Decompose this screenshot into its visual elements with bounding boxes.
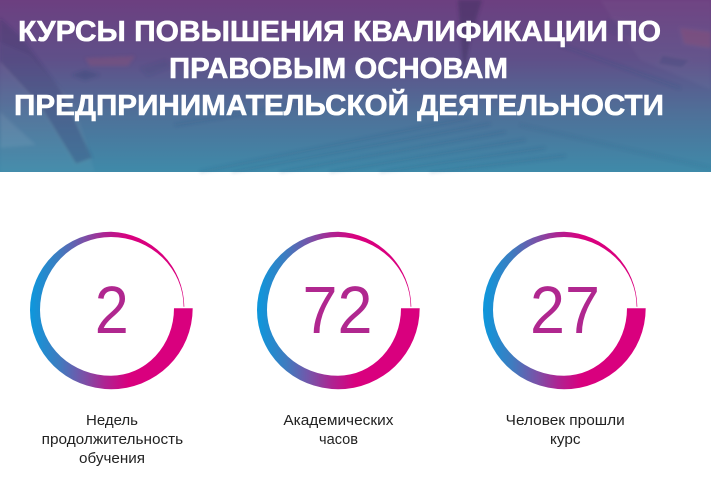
number 2: 2 — [95, 273, 129, 348]
stat: 72 hours — [257, 232, 420, 448]
label 1: продолжительность — [42, 431, 183, 448]
label 3 — [506, 412, 625, 448]
number 72: 72 — [302, 273, 372, 348]
title: ПРАВОВЫМ ОСНОВАМ — [169, 53, 508, 85]
stat: 27 people — [483, 232, 646, 448]
label 1 — [42, 412, 183, 467]
number 27: 27 — [530, 273, 600, 348]
label 2: часов — [319, 431, 358, 448]
title: КУРСЫ ПОВЫШЕНИЯ КВАЛИФИКАЦИИ ПО — [18, 16, 661, 48]
title — [14, 16, 664, 122]
stat: 2 weeks — [30, 232, 193, 467]
ring 2 — [257, 232, 420, 389]
title: ПРЕДПРИНИМАТЕЛЬСКОЙ ДЕЯТЕЛЬНОСТИ — [14, 89, 664, 122]
label 3: Человек прошли — [506, 412, 625, 429]
header banner — [0, 0, 711, 172]
ring 1 — [30, 232, 193, 389]
ring 3 — [483, 232, 646, 389]
label 1: Недель — [86, 412, 138, 429]
label 3: курс — [550, 431, 581, 448]
label 2: Академических — [283, 412, 394, 429]
label 2 — [283, 412, 394, 448]
label 1: обучения — [79, 450, 145, 467]
